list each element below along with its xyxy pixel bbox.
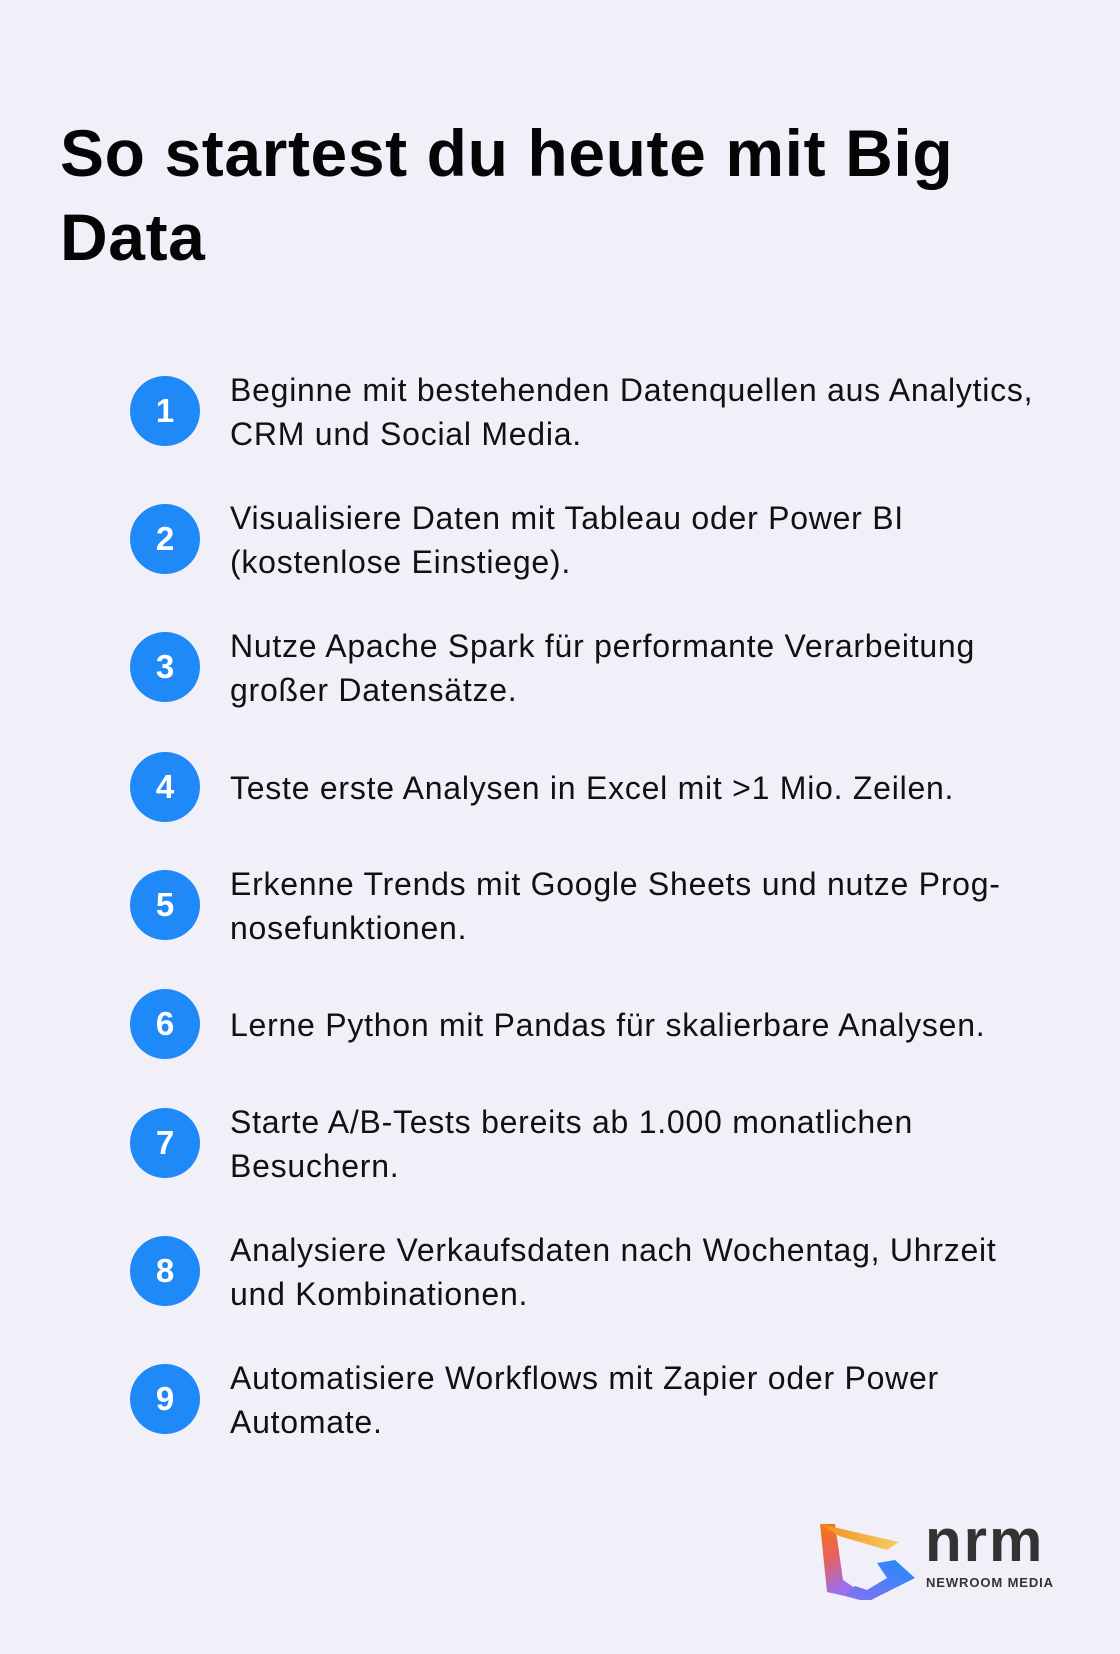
logo [820,1507,1054,1600]
step 8: und Kombinationen. [230,1276,528,1312]
step 6: 6 [156,1005,174,1042]
step 3 [130,628,975,708]
step 6 [130,989,985,1059]
step 7: 7 [156,1124,174,1161]
step 4: Teste erste Analysen in Excel mit >1 Mio. Zeilen. [230,770,954,806]
step 2 [130,500,904,580]
step 5: 5 [156,886,174,923]
icon: logo mark [820,1524,915,1600]
step 2: Visualisiere Daten mit Tableau oder Power BI [230,500,904,536]
step 3: 3 [156,648,174,685]
step 6: Lerne Python mit Pandas für skalierbare Analysen. [230,1007,985,1043]
step 9: Automatisiere Workflows mit Zapier oder Power [230,1360,939,1396]
title [60,116,953,274]
step 7: Besuchern. [230,1148,399,1184]
logo: NEWROOM MEDIA [926,1575,1054,1590]
step 1 [130,372,1033,452]
step 8: 8 [156,1252,174,1289]
step 7 [130,1104,913,1184]
step 2: (kostenlose Einstiege). [230,544,571,580]
step 1: Beginne mit bestehenden Datenquellen aus Analytics, [230,372,1033,408]
step 5 [130,866,1001,946]
step 5: Erkenne Trends mit Google Sheets und nutze Prog- [230,866,1001,902]
step 1: 1 [156,392,174,429]
step 1: CRM und Social Media. [230,416,582,452]
title: Data [60,200,205,274]
step 3: Nutze Apache Spark für performante Verarbeitung [230,628,975,664]
step 5: nosefunktionen. [230,910,467,946]
step 4: 4 [156,768,174,805]
step 4 [130,752,954,822]
step 8: Analysiere Verkaufsdaten nach Wochentag, Uhrzeit [230,1232,996,1268]
logo text: nrm [925,1507,1044,1574]
step 3: großer Datensätze. [230,672,517,708]
title: So startest du heute mit Big [60,116,953,190]
step 2: 2 [156,520,174,557]
step 9: 9 [156,1380,174,1417]
step 9 [130,1360,939,1440]
step 9: Automate. [230,1404,383,1440]
step 7: Starte A/B-Tests bereits ab 1.000 monatlichen [230,1104,913,1140]
step 8 [130,1232,996,1312]
